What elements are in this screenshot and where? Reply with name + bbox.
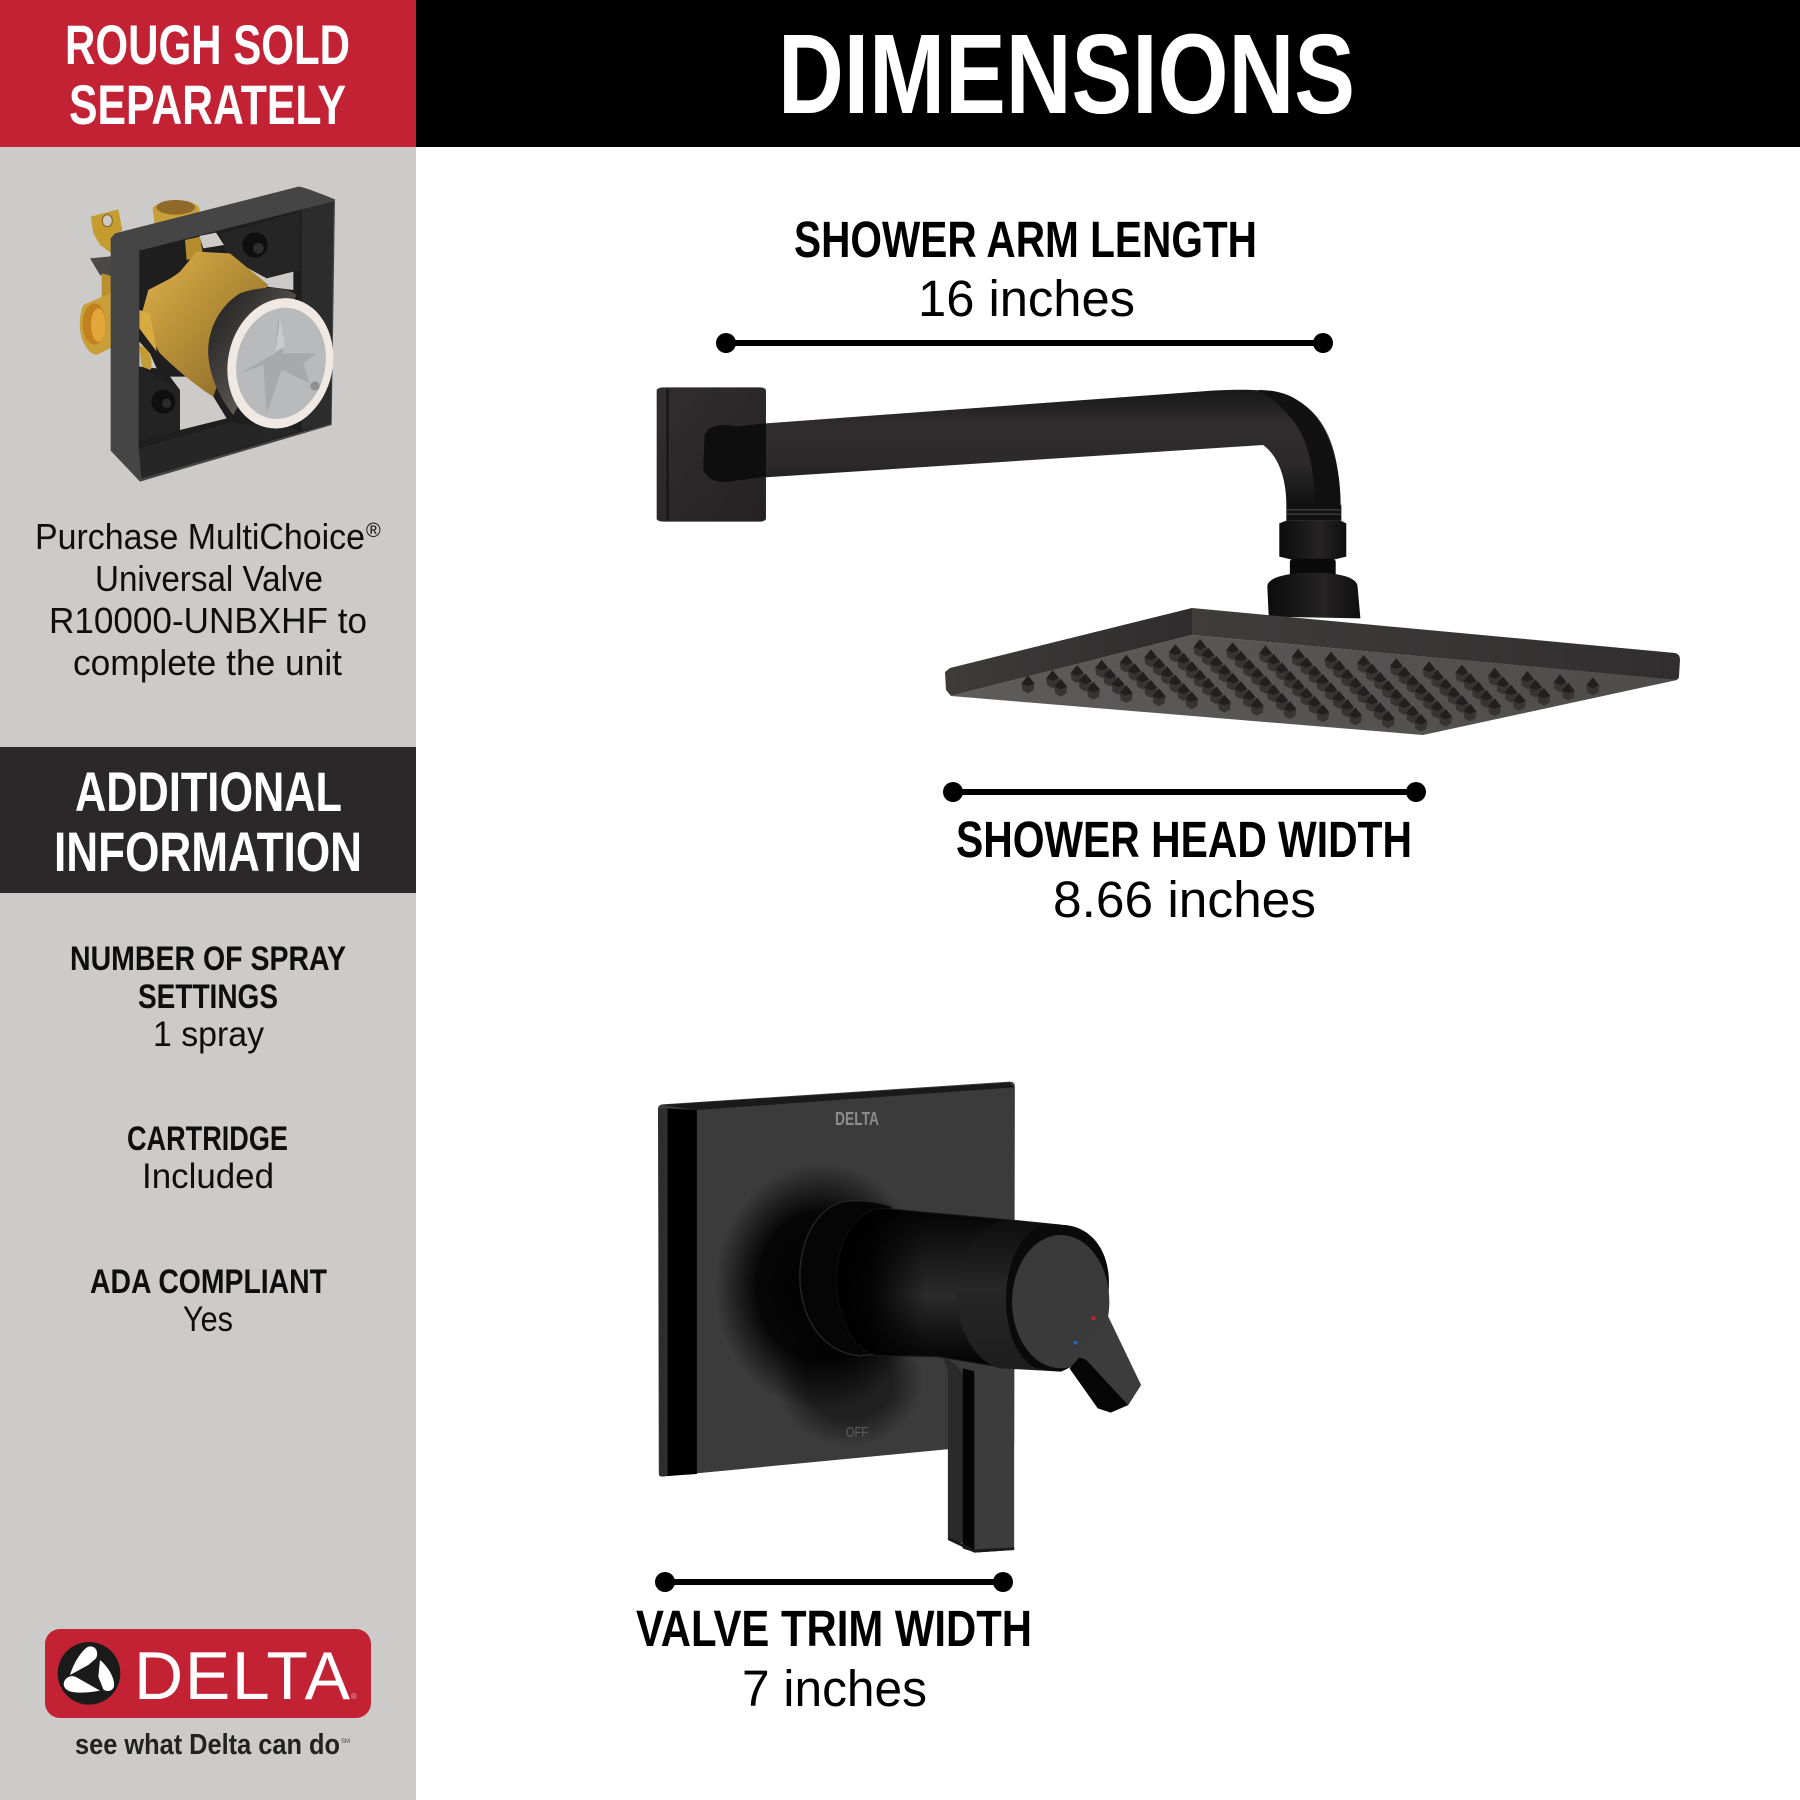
text block: valve purchase note: ® xyxy=(366,520,381,542)
logo: delta: DELTA xyxy=(134,1638,351,1714)
heading: additional information xyxy=(0,747,416,893)
icon: delta symbol xyxy=(58,1642,120,1705)
arrow: valve trim dimension line xyxy=(655,1572,1013,1592)
text block: cartridge xyxy=(127,1120,288,1196)
plate lettering: off: OFF xyxy=(846,1424,868,1441)
text block: cartridge: Included xyxy=(142,1157,274,1196)
shower arm xyxy=(657,387,1360,618)
logo: delta: ® xyxy=(351,1692,357,1701)
icon: valve trim xyxy=(658,1082,1141,1553)
icon: shower arm and head xyxy=(657,387,1680,735)
heading: valve trim width: VALVE TRIM WIDTH xyxy=(636,1600,1032,1657)
text block: valve purchase note xyxy=(35,516,381,683)
shower head rim xyxy=(1192,608,1680,680)
title: dimensions xyxy=(416,0,1800,147)
text block: valve purchase note: Purchase MultiChoice xyxy=(35,516,365,557)
text block: ada compliant: ADA COMPLIANT xyxy=(90,1263,327,1301)
heading: shower head width: 8.66 inches xyxy=(1053,871,1316,928)
text block: ada compliant xyxy=(90,1263,327,1339)
text block: number of spray settings xyxy=(70,940,346,1054)
text block: cartridge: CARTRIDGE xyxy=(127,1120,288,1158)
text block: valve purchase note: R10000-UNBXHF to xyxy=(49,600,367,641)
panel: rough sold separately banner: SEPARATELY xyxy=(69,73,346,136)
panel: left sidebar background xyxy=(0,0,416,1800)
heading: shower arm length: SHOWER ARM LENGTH xyxy=(794,211,1257,268)
heading: shower arm length: 16 inches xyxy=(918,270,1135,327)
heading: shower head width: SHOWER HEAD WIDTH xyxy=(956,811,1412,868)
icon: rough-in valve product image xyxy=(80,187,345,482)
title: dimensions: DIMENSIONS xyxy=(778,11,1355,137)
heading: additional information: ADDITIONAL xyxy=(75,760,342,823)
heading: shower head width xyxy=(956,811,1412,928)
text block: ada compliant: Yes xyxy=(183,1300,233,1339)
text block: valve purchase note: complete the unit xyxy=(73,642,342,683)
arrow: shower arm dimension line xyxy=(716,333,1333,353)
shower head face xyxy=(951,635,1677,735)
heading: valve trim width xyxy=(636,1600,1032,1717)
heading: additional information: INFORMATION xyxy=(54,820,362,883)
heading: shower arm length xyxy=(794,211,1257,327)
heading: valve trim width: 7 inches xyxy=(742,1660,927,1717)
logo: delta xyxy=(45,1629,371,1761)
logo: delta: see what Delta can do xyxy=(75,1729,340,1761)
panel: rough sold separately banner xyxy=(0,0,416,147)
text block: valve purchase note: Universal Valve xyxy=(95,558,323,599)
text block: number of spray settings: NUMBER OF SPRAY xyxy=(70,940,346,978)
shower head nozzles xyxy=(1022,639,1599,732)
panel: rough sold separately banner: ROUGH SOLD xyxy=(65,13,350,76)
plate lettering: delta: DELTA xyxy=(835,1109,879,1129)
text block: number of spray settings: SETTINGS xyxy=(138,978,278,1016)
text block: number of spray settings: 1 spray xyxy=(153,1015,264,1054)
logo: delta: SM xyxy=(341,1739,350,1745)
arrow: shower head dimension line xyxy=(943,782,1426,802)
